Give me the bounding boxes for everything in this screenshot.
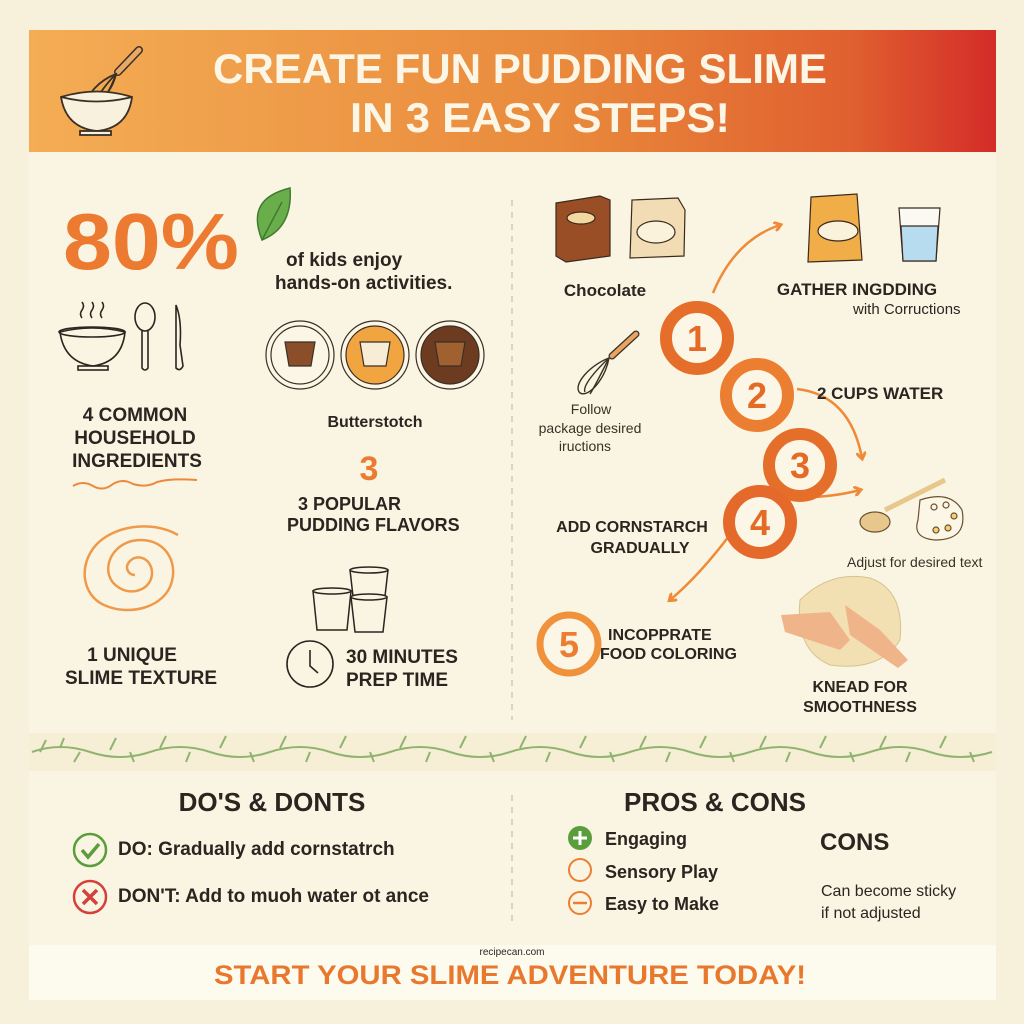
panel: pros and cons: if not adjusted [821, 905, 921, 922]
title: IN 3 EASY STEPS! [350, 94, 730, 141]
footer call to action [29, 945, 996, 1000]
panel: do's and don'ts: DON'T: Add to muoh water ot ance [118, 886, 429, 907]
title: CREATE FUN PUDDING SLIME [213, 45, 827, 92]
panel: do's and don'ts [74, 787, 429, 913]
step circles [540, 307, 831, 673]
stat: 4 common household ingredients: HOUSEHOLD [74, 428, 196, 449]
icon: spoon and palette [860, 480, 963, 540]
icon: pudding cups [266, 321, 484, 389]
panel: do's and don'ts: DO'S & DONTS [179, 787, 365, 817]
steps flow: package desired [539, 420, 641, 436]
step circles: 1 [687, 318, 707, 359]
icon: pudding box and bag [556, 196, 685, 262]
stat: 30 minutes prep time [287, 567, 458, 691]
panel: pros and cons: Sensory Play [605, 862, 718, 882]
panel: pros and cons: Engaging [605, 829, 687, 849]
icon: whisk in bowl [61, 50, 139, 135]
stat: 4 common household ingredients: 4 COMMON [83, 405, 187, 426]
vine divider [29, 733, 996, 771]
icon: cups [313, 567, 388, 632]
step circles: 3 [790, 445, 810, 486]
panel: pros and cons: Can become sticky [821, 883, 956, 900]
steps flow: with Corructions [852, 301, 961, 318]
icon: check [74, 834, 106, 866]
stat: 80% [63, 188, 452, 294]
arrows [670, 225, 862, 600]
stat: 3 popular pudding flavors: PUDDING FLAVORS [287, 515, 460, 535]
icon: whisk [578, 334, 636, 394]
header banner [29, 30, 996, 152]
steps flow: GATHER INGDDING [777, 280, 937, 299]
stat: 80%: of kids enjoy [286, 250, 403, 271]
steps flow: Follow [571, 401, 612, 417]
stat: 30 minutes prep time: 30 MINUTES [346, 647, 458, 668]
steps flow: 2 CUPS WATER [817, 384, 943, 403]
step circles: 4 [750, 502, 770, 543]
footer call to action: START YOUR SLIME ADVENTURE TODAY! [214, 960, 806, 990]
stat: 3 popular pudding flavors: 3 [360, 450, 378, 488]
stat: 4 common household ingredients [59, 302, 202, 489]
panel: pros and cons [568, 787, 956, 922]
icon: kneading hands [781, 576, 908, 668]
stat: 3 popular pudding flavors: 3 POPULAR [298, 494, 401, 514]
steps flow: INCOPPRATE [608, 627, 712, 644]
step circles: 2 [747, 375, 767, 416]
panel: do's and don'ts: DO: Gradually add cornstatrch [118, 839, 395, 860]
panel: pros and cons: PROS & CONS [624, 787, 806, 817]
steps flow: FOOD COLORING [600, 646, 737, 663]
steps flow [539, 194, 983, 716]
icon: spiral [85, 526, 178, 610]
stat: 1 unique slime texture: SLIME TEXTURE [65, 668, 217, 689]
icon: leaf [257, 188, 290, 240]
stat: 4 common household ingredients: INGREDIENTS [72, 451, 202, 472]
icon: orange bag and water glass [808, 194, 940, 262]
steps flow: ADD CORNSTARCH [556, 519, 708, 536]
icon: cross [74, 881, 106, 913]
stat: 3 popular pudding flavors [266, 321, 484, 535]
stat: 80%: 80% [63, 197, 239, 286]
icon: bowl and cutlery [59, 302, 183, 370]
stat: 1 unique slime texture: 1 UNIQUE [87, 645, 177, 666]
stat: 3 popular pudding flavors: Butterstotch [327, 414, 423, 431]
steps flow: KNEAD FOR [812, 679, 908, 696]
stat: 1 unique slime texture [65, 526, 217, 689]
panel: pros and cons: Easy to Make [605, 894, 719, 914]
steps flow: Adjust for desired text [847, 554, 983, 570]
steps flow: Chocolate [564, 281, 646, 300]
step circles: 5 [559, 624, 579, 665]
icon: clock [287, 641, 333, 687]
footer call to action: recipecan.com [479, 947, 545, 958]
stat: 30 minutes prep time: PREP TIME [346, 670, 448, 691]
title [213, 45, 827, 141]
steps flow: iructions [559, 438, 611, 454]
steps flow: GRADUALLY [591, 540, 690, 557]
steps flow: SMOOTHNESS [803, 699, 917, 716]
panel: pros and cons: CONS [820, 829, 889, 856]
stat: 80%: hands-on activities. [275, 273, 452, 294]
dashed dividers [511, 200, 513, 720]
